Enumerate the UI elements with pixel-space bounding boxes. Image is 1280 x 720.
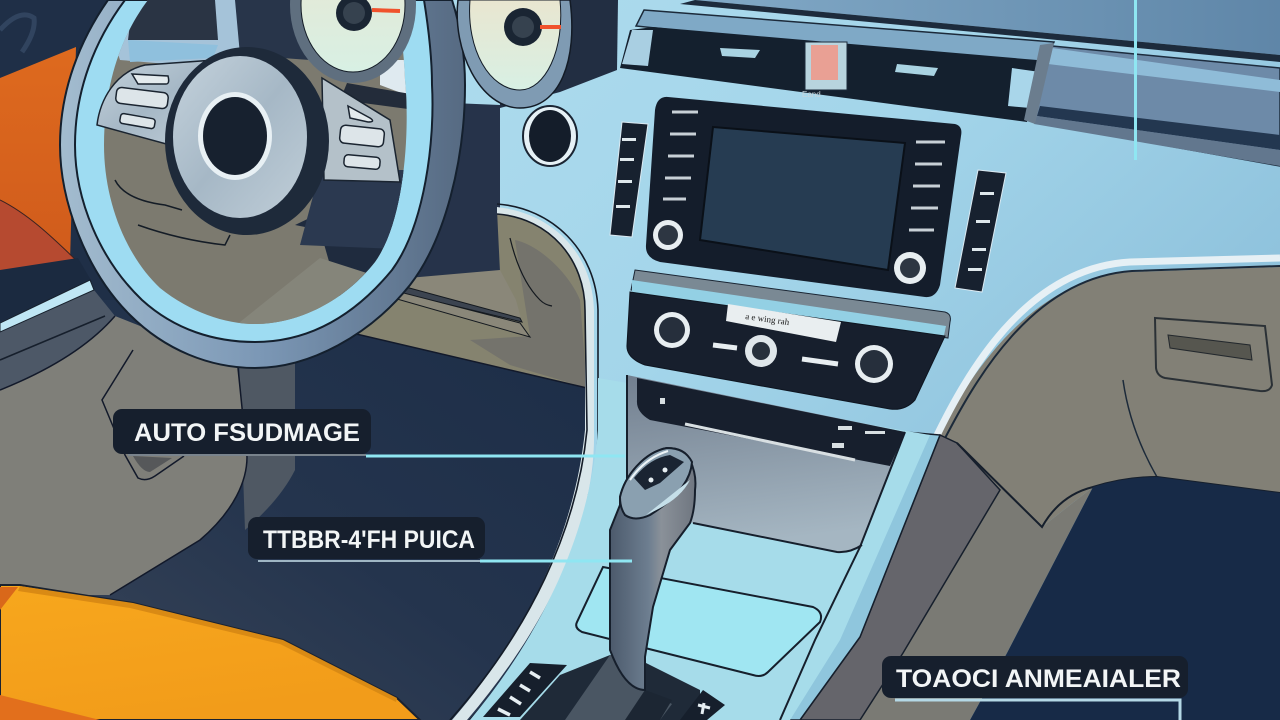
callout: bottom right label: [882, 656, 1188, 720]
left spoke controls: [97, 60, 215, 145]
wheel rim: [60, 0, 465, 368]
infotainment unit: [646, 97, 961, 297]
right lower beige panel: [930, 258, 1280, 527]
instrument gauge left: [290, 0, 416, 83]
orange seat: [0, 585, 420, 720]
left dark door top: [0, 15, 34, 52]
footwell navy: [0, 300, 588, 720]
callout: top leader line: [1134, 0, 1137, 160]
callout: bottom right label: TOAOCI ANMEAIALER: [896, 665, 1181, 693]
console side chrome trim: [450, 204, 598, 720]
climate control unit: [627, 270, 950, 409]
right dash panel: [1034, 45, 1280, 166]
callout: auto label: AUTO FSUDMAGE: [134, 419, 360, 447]
shifter base: [483, 655, 725, 720]
central console body: [470, 375, 930, 720]
knobs: [654, 312, 690, 348]
steering wheel: [60, 0, 465, 368]
callout: middle label: TTBBR-4'FH PUICA: [263, 526, 475, 554]
display label: [726, 304, 841, 342]
console grey trim strip: [770, 432, 940, 720]
callout: auto label: [113, 409, 625, 456]
vent assembly: Eand: [802, 90, 821, 99]
navy seat footwell right: [970, 477, 1280, 720]
speaker: [523, 106, 577, 166]
instrument gauge right: [457, 0, 618, 108]
screen: [700, 127, 905, 270]
right spoke controls: [322, 78, 400, 182]
wheel interior: [90, 0, 420, 330]
upper dashboard surface: [620, 0, 1280, 62]
callout: middle label: [248, 517, 632, 561]
left button strip: [610, 122, 648, 237]
console tray: [576, 567, 821, 676]
door handle bar: [0, 258, 115, 390]
left cabin backing: [0, 0, 130, 345]
beige console side: [352, 210, 587, 388]
wheel hub: [165, 47, 329, 235]
lower right grey bands: [800, 435, 1280, 720]
vent assembly: [620, 10, 1054, 124]
glove box handle: [1155, 318, 1272, 391]
right button strip: [955, 170, 1006, 292]
door orange panel: [0, 47, 78, 280]
left taupe floor panel: [0, 316, 247, 595]
gear shift lever: [610, 448, 695, 690]
dark steering column: [380, 100, 500, 280]
lower control strip: [637, 378, 905, 466]
climate control unit: a e wing rah: [745, 311, 790, 327]
